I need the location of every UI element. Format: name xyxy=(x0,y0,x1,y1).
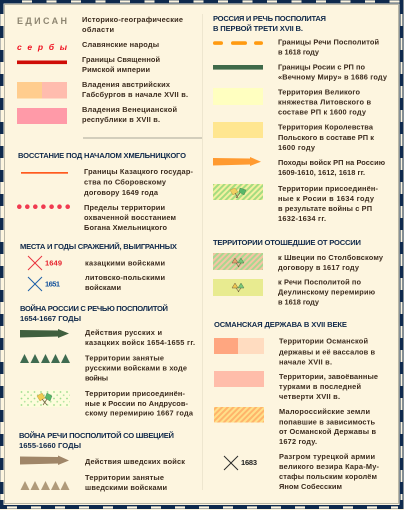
icon: slavic peoples sample: сербы xyxy=(17,42,68,52)
legend descriptions: Историко-географические xyxy=(82,15,183,24)
descriptions: в 1618 году xyxy=(278,48,320,56)
panel: general legend xyxy=(17,15,188,124)
icon: Ottoman swatch xyxy=(214,338,264,354)
descriptions xyxy=(84,167,194,232)
icon: empire border line xyxy=(17,60,67,64)
descriptions: от Османской Державы в xyxy=(279,427,376,436)
descriptions: Территории Османской xyxy=(279,336,368,345)
descriptions: Разгром турецкой армии xyxy=(279,452,375,461)
heading: ВОЙНА РЕЧИ ПОСПОЛИТОЙ СО ШВЕЦИЕЙ xyxy=(19,431,174,440)
icon: Austrian Habsburg swatch xyxy=(17,82,67,98)
descriptions: в результате войны с РП xyxy=(278,204,372,213)
icon: dark green arrow xyxy=(20,329,69,338)
descriptions: в 1618 году xyxy=(278,298,320,306)
descriptions: Границы Росии с РП по xyxy=(278,62,365,72)
descriptions: договору в 1617 году xyxy=(278,263,360,272)
descriptions: «Вечному Миру» в 1686 году xyxy=(278,72,388,82)
descriptions: ные к России по Андрусов- xyxy=(85,399,189,408)
icon: cossack state border xyxy=(21,172,68,174)
descriptions: попавшие в зависимость xyxy=(279,418,375,426)
icon: region label sample: ЕДИСАН xyxy=(17,16,67,26)
legend descriptions: Габсбургов в начале XVII в. xyxy=(82,90,188,99)
legend descriptions xyxy=(82,15,188,124)
legend descriptions: Римской империи xyxy=(82,65,150,74)
icon: hatched swatch xyxy=(214,407,264,422)
heading: ТЕРРИТОРИИ ОТОШЕДШИЕ ОТ РОССИИ xyxy=(213,238,361,247)
icon: annexed territory swatch with flags xyxy=(20,390,70,407)
descriptions: шведскими войсками xyxy=(85,483,167,492)
descriptions: 1600 году xyxy=(278,143,316,152)
year label: 1649 xyxy=(45,258,62,268)
descriptions: ные к Росии в 1634 году xyxy=(278,194,375,203)
descriptions: к Швеции по Столбовскому xyxy=(278,253,384,262)
descriptions: Территории, завоёванные xyxy=(279,372,378,381)
icon: blue crossed swords xyxy=(28,277,42,291)
heading xyxy=(19,431,174,450)
descriptions: княжества Литовского в xyxy=(278,98,371,106)
heading: 1654-1667 ГОДЫ xyxy=(20,314,81,323)
panel: battles xyxy=(20,242,177,292)
icon: russian occupied triangles xyxy=(20,354,70,363)
icon: conquered swatch xyxy=(214,371,264,387)
legend descriptions: Владения Венецианской xyxy=(82,105,177,114)
heading: В ПЕРВОЙ ТРЕТИ XVII В. xyxy=(213,24,303,33)
descriptions: охваченной восстанием xyxy=(84,213,176,222)
descriptions xyxy=(85,258,165,292)
heading: РОССИЯ И РЕЧЬ ПОСПОЛИТАЯ xyxy=(213,14,326,23)
icon: commonwealth border dashes xyxy=(213,41,263,45)
descriptions: составе РП к 1600 году xyxy=(278,108,367,116)
panel: lost territories xyxy=(213,238,384,306)
icon: swedish occupied triangles xyxy=(20,481,70,490)
icon: red crossed swords xyxy=(28,256,42,270)
descriptions: войны xyxy=(85,374,108,382)
descriptions: великого везира Кара-Му- xyxy=(279,462,380,471)
descriptions: казацких войск 1654-1655 гг. xyxy=(85,338,195,347)
descriptions xyxy=(85,457,185,492)
icon: annexed 1634 swatch xyxy=(213,184,263,200)
heading: МЕСТА И ГОДЫ СРАЖЕНИЙ, ВЫИГРАННЫХ xyxy=(20,242,177,251)
legend descriptions: республики в XVII в. xyxy=(82,115,160,124)
panel: war with Commonwealth xyxy=(20,304,195,418)
column dividers xyxy=(83,14,202,490)
icon: Lithuania swatch xyxy=(213,88,263,105)
descriptions: Границы Речи Посполитой xyxy=(278,38,379,46)
descriptions: ства по Сборовскому xyxy=(84,178,167,186)
panel: war with Sweden xyxy=(19,431,185,492)
descriptions: Яном Собесским xyxy=(279,482,342,491)
panel: Ottoman state xyxy=(214,320,380,491)
year label: 1651 xyxy=(45,280,60,288)
descriptions: Территория Великого xyxy=(278,88,360,96)
heading xyxy=(20,304,168,323)
year label: 1683 xyxy=(241,458,257,467)
descriptions: начале XVII в. xyxy=(279,358,332,367)
icon: Venice swatch xyxy=(17,108,67,124)
descriptions: Территории присоединён- xyxy=(85,389,186,398)
heading: ВОССТАНИЕ ПОД НАЧАЛОМ ХМЕЛЬНИЦКОГО xyxy=(18,151,186,160)
descriptions: Деулинскому перемирию xyxy=(278,288,376,296)
descriptions xyxy=(279,336,380,491)
heading: ВОЙНА РОССИИ С РЕЧЬЮ ПОСПОЛИТОЙ xyxy=(20,304,168,313)
descriptions: скому перемирию 1667 года xyxy=(85,408,194,418)
descriptions: Границы Казацкого государ- xyxy=(84,167,194,176)
descriptions: Территории занятые xyxy=(85,354,164,362)
descriptions: Богана Хмельницкого xyxy=(84,223,167,232)
descriptions xyxy=(278,38,388,223)
descriptions: Территория Королевства xyxy=(278,122,374,132)
descriptions: стафы польским королём xyxy=(279,472,377,481)
descriptions: 1609-1610, 1612, 1618 гг. xyxy=(278,168,365,177)
descriptions: русскими войсками в ходе xyxy=(85,364,187,372)
icon: eternal peace border xyxy=(213,65,263,70)
descriptions: казацкими войсками xyxy=(85,258,165,268)
descriptions: четверти XVII в. xyxy=(279,392,340,401)
descriptions: державы и её вассалов в xyxy=(279,348,375,357)
descriptions: Действия шведских войск xyxy=(85,457,185,466)
icon: Deulino swatch xyxy=(213,279,263,296)
descriptions: Действия русских и xyxy=(85,328,162,337)
legend descriptions: Славянские народы xyxy=(82,40,159,49)
descriptions: турками в последней xyxy=(279,382,361,391)
icon: Stolbovo swatch xyxy=(213,253,263,270)
descriptions: Малороссийские земли xyxy=(279,407,370,416)
panel: Khmelnytsky uprising xyxy=(17,151,194,232)
panel: Russia and Commonwealth early XVII xyxy=(213,14,388,223)
icon: black crossed swords xyxy=(224,456,238,470)
descriptions: 1632-1634 гг. xyxy=(278,214,326,223)
icon: brown arrow xyxy=(20,456,69,465)
heading: ОСМАНСКАЯ ДЕРЖАВА В XVII ВЕКЕ xyxy=(214,320,347,329)
descriptions: Польского в составе РП к xyxy=(278,133,374,142)
icon: uprising extent dots xyxy=(17,204,70,209)
descriptions xyxy=(85,328,195,418)
heading: 1655-1660 ГОДЫ xyxy=(19,441,81,450)
descriptions: Пределы территории xyxy=(84,203,165,212)
descriptions: договору 1649 года xyxy=(84,188,159,197)
heading xyxy=(213,14,326,33)
legend descriptions: Владения австрийских xyxy=(82,80,171,89)
icon: orange arrow xyxy=(213,157,261,166)
legend descriptions: Границы Священной xyxy=(82,55,160,64)
descriptions: Походы войск РП на Россию xyxy=(278,158,386,167)
icon: Poland swatch xyxy=(213,122,263,138)
descriptions: Территории занятые xyxy=(85,473,164,482)
descriptions: 1672 году. xyxy=(279,437,317,446)
descriptions: Территории присоединён- xyxy=(278,184,379,193)
descriptions: войсками xyxy=(85,283,121,292)
legend descriptions: области xyxy=(82,25,114,34)
descriptions xyxy=(278,253,384,306)
descriptions: к Речи Посполитой по xyxy=(278,278,361,286)
descriptions: литовско-польскими xyxy=(85,273,165,282)
